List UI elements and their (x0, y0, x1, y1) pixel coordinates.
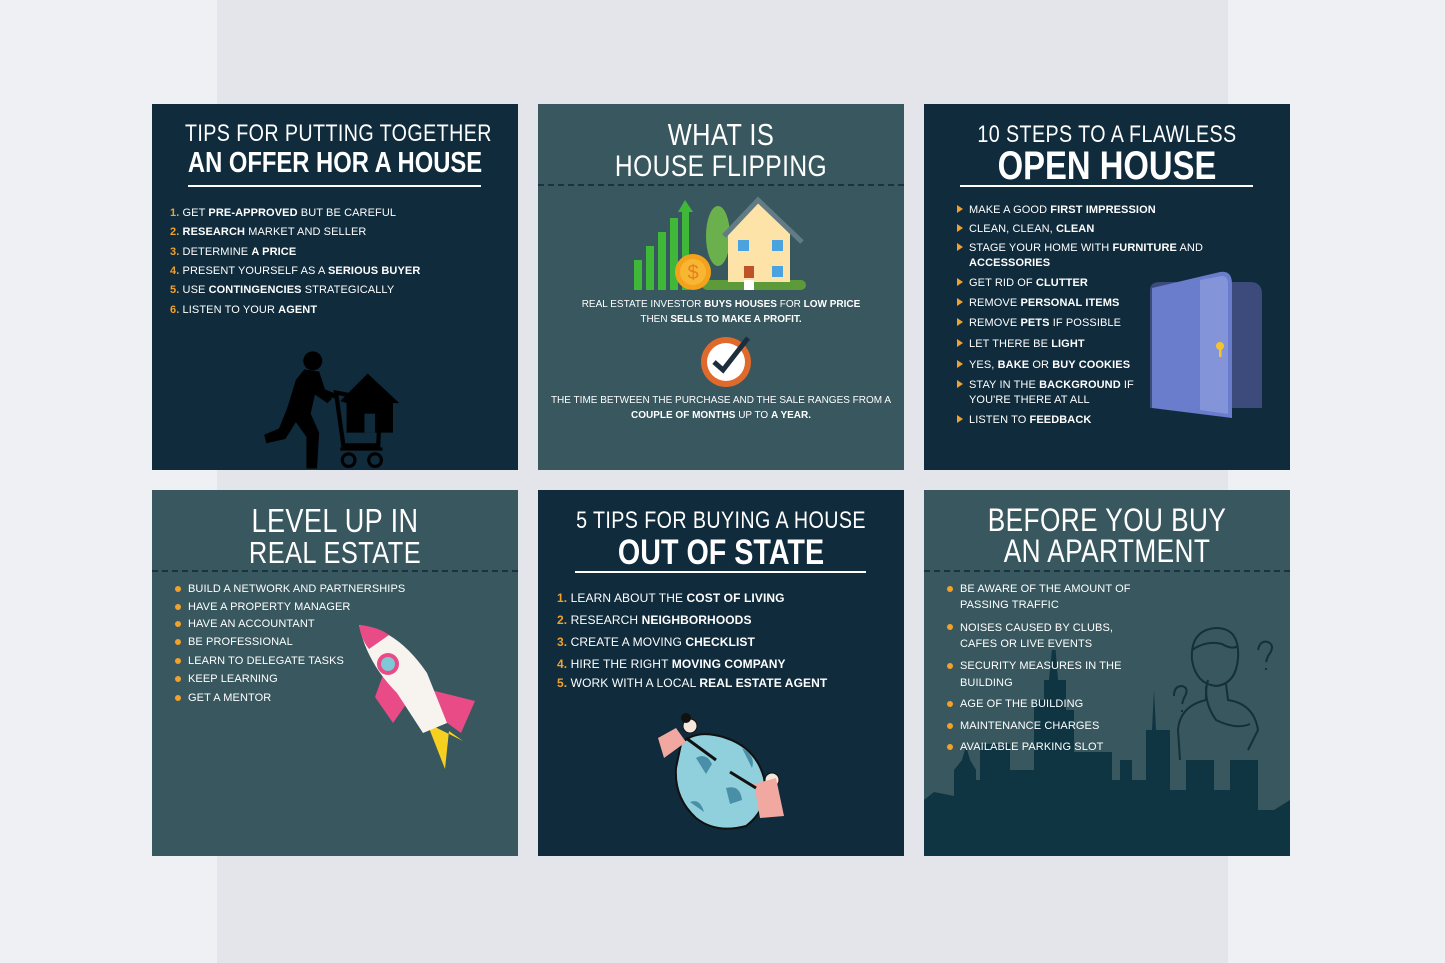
list: out of state tips (557, 591, 828, 690)
panel: out of state: OUT OF STATE (618, 533, 824, 572)
title (249, 502, 421, 570)
panel: out of state: 5 TIPS FOR BUYING A HOUSE (576, 507, 866, 534)
panel: house flipping: THEN SELLS TO MAKE A PROFIT. (640, 314, 802, 325)
title (185, 120, 492, 179)
icon: house with chart and coin: $ (687, 262, 699, 284)
panel: before you buy apartment: AN APARTMENT (1004, 533, 1210, 569)
title (615, 117, 827, 183)
panel: house flipping: REAL ESTATE INVESTOR BUYS HOUSES FOR LOW PRICE (582, 299, 860, 310)
panel: offer tips: AN OFFER HOR A HOUSE (188, 147, 482, 179)
panel: before you buy apartment: PASSING TRAFFIC (960, 599, 1059, 611)
icon: people hugging globe (658, 713, 784, 830)
text: timeline (551, 395, 891, 421)
panel: level up: BE PROFESSIONAL (188, 636, 293, 648)
panel: open house: YOU'RE THERE AT ALL (969, 394, 1090, 406)
panel: out of state: 3. CREATE A MOVING CHECKLIST (557, 635, 755, 649)
icon: rocket (359, 625, 475, 769)
panel: before you buy apartment: BE AWARE OF THE AMOUNT OF (960, 583, 1131, 595)
text: definition (582, 299, 860, 325)
panel: offer tips: TIPS FOR PUTTING TOGETHER (185, 120, 492, 147)
panel: offer tips: 3. DETERMINE A PRICE (170, 246, 296, 258)
panel: open house: STAY IN THE BACKGROUND IF (969, 379, 1134, 391)
panel: open house: GET RID OF CLUTTER (969, 277, 1088, 289)
icon: man pushing cart with house (264, 351, 399, 468)
icon: house with chart and coin (634, 196, 806, 290)
panel: out of state: 4. HIRE THE RIGHT MOVING COMPANY (557, 657, 786, 671)
panel: level up: HAVE A PROPERTY MANAGER (188, 601, 350, 613)
panel: out of state: 5. WORK WITH A LOCAL REAL ESTATE AGENT (557, 676, 827, 690)
panel: open house: CLEAN, CLEAN, CLEAN (969, 223, 1094, 235)
title (977, 121, 1237, 188)
list: level up (175, 583, 405, 704)
icon: open door (1150, 272, 1262, 418)
panel: before you buy apartment: MAINTENANCE CHARGES (960, 720, 1099, 732)
panel: before you buy apartment: BEFORE YOU BUY (988, 502, 1226, 538)
panel: open house: YES, BAKE OR BUY COOKIES (969, 359, 1130, 371)
panel: open house: OPEN HOUSE (998, 144, 1216, 188)
panel: level up: GET A MENTOR (188, 692, 271, 704)
icon: clock with check (701, 336, 751, 387)
skyline (924, 650, 1290, 856)
panel: open house: STAGE YOUR HOME WITH FURNITURE AND (969, 242, 1203, 254)
panel: out of state: 1. LEARN ABOUT THE COST OF LIVING (557, 591, 785, 605)
panel: offer tips: 6. LISTEN TO YOUR AGENT (170, 304, 317, 316)
icon: thinking person (1173, 627, 1273, 760)
panel: level up (152, 490, 518, 856)
panel: open house: MAKE A GOOD FIRST IMPRESSION (969, 204, 1156, 216)
panel: house flipping: HOUSE FLIPPING (615, 150, 827, 183)
panel: open house: REMOVE PERSONAL ITEMS (969, 297, 1119, 309)
panel: before you buy apartment: CAFES OR LIVE EVENTS (960, 638, 1092, 650)
panel: before you buy apartment: AVAILABLE PARKING SLOT (960, 741, 1103, 753)
panel: level up: HAVE AN ACCOUNTANT (188, 618, 315, 630)
list: offer tips (170, 207, 420, 316)
panel: level up: LEARN TO DELEGATE TASKS (188, 655, 344, 667)
title (576, 507, 866, 572)
panel: house flipping: WHAT IS (668, 117, 774, 152)
panel: out of state: 2. RESEARCH NEIGHBORHOODS (557, 613, 752, 627)
panel: before you buy apartment: SECURITY MEASURES IN THE (960, 660, 1122, 672)
panel: open house: LET THERE BE LIGHT (969, 338, 1085, 350)
panel: open house: LISTEN TO FEEDBACK (969, 414, 1091, 426)
panel: level up: LEVEL UP IN (252, 502, 418, 539)
list: apartment checklist (947, 583, 1131, 753)
panel: open house: 10 STEPS TO A FLAWLESS (977, 121, 1237, 148)
panel: offer tips: 2. RESEARCH MARKET AND SELLER (170, 226, 366, 238)
panel: before you buy apartment (924, 490, 1290, 856)
panel: out of state (538, 490, 904, 856)
panel: open house: REMOVE PETS IF POSSIBLE (969, 317, 1121, 329)
panel: offer tips: 1. GET PRE-APPROVED BUT BE CAREFUL (170, 207, 396, 219)
panel: house flipping (538, 104, 904, 470)
panel: open house (924, 104, 1290, 470)
list: open house steps (957, 204, 1203, 426)
title (988, 502, 1226, 569)
panel: offer tips: 5. USE CONTINGENCIES STRATEGICALLY (170, 284, 394, 296)
panel: house flipping: COUPLE OF MONTHS UP TO A YEAR. (631, 410, 811, 421)
panel: before you buy apartment: BUILDING (960, 677, 1013, 689)
panel: offer tips: 4. PRESENT YOURSELF AS A SERIOUS BUYER (170, 265, 420, 277)
panel: level up: BUILD A NETWORK AND PARTNERSHIPS (188, 583, 405, 595)
panel: level up: KEEP LEARNING (188, 673, 278, 685)
panel: before you buy apartment: NOISES CAUSED BY CLUBS, (960, 622, 1113, 634)
panel: level up: REAL ESTATE (249, 535, 421, 570)
panel: before you buy apartment: AGE OF THE BUILDING (960, 698, 1083, 710)
panel: offer tips (152, 104, 518, 470)
panel: house flipping: THE TIME BETWEEN THE PURCHASE AND THE SALE RANGES FROM A (551, 395, 891, 406)
panel: open house: ACCESSORIES (969, 257, 1050, 269)
